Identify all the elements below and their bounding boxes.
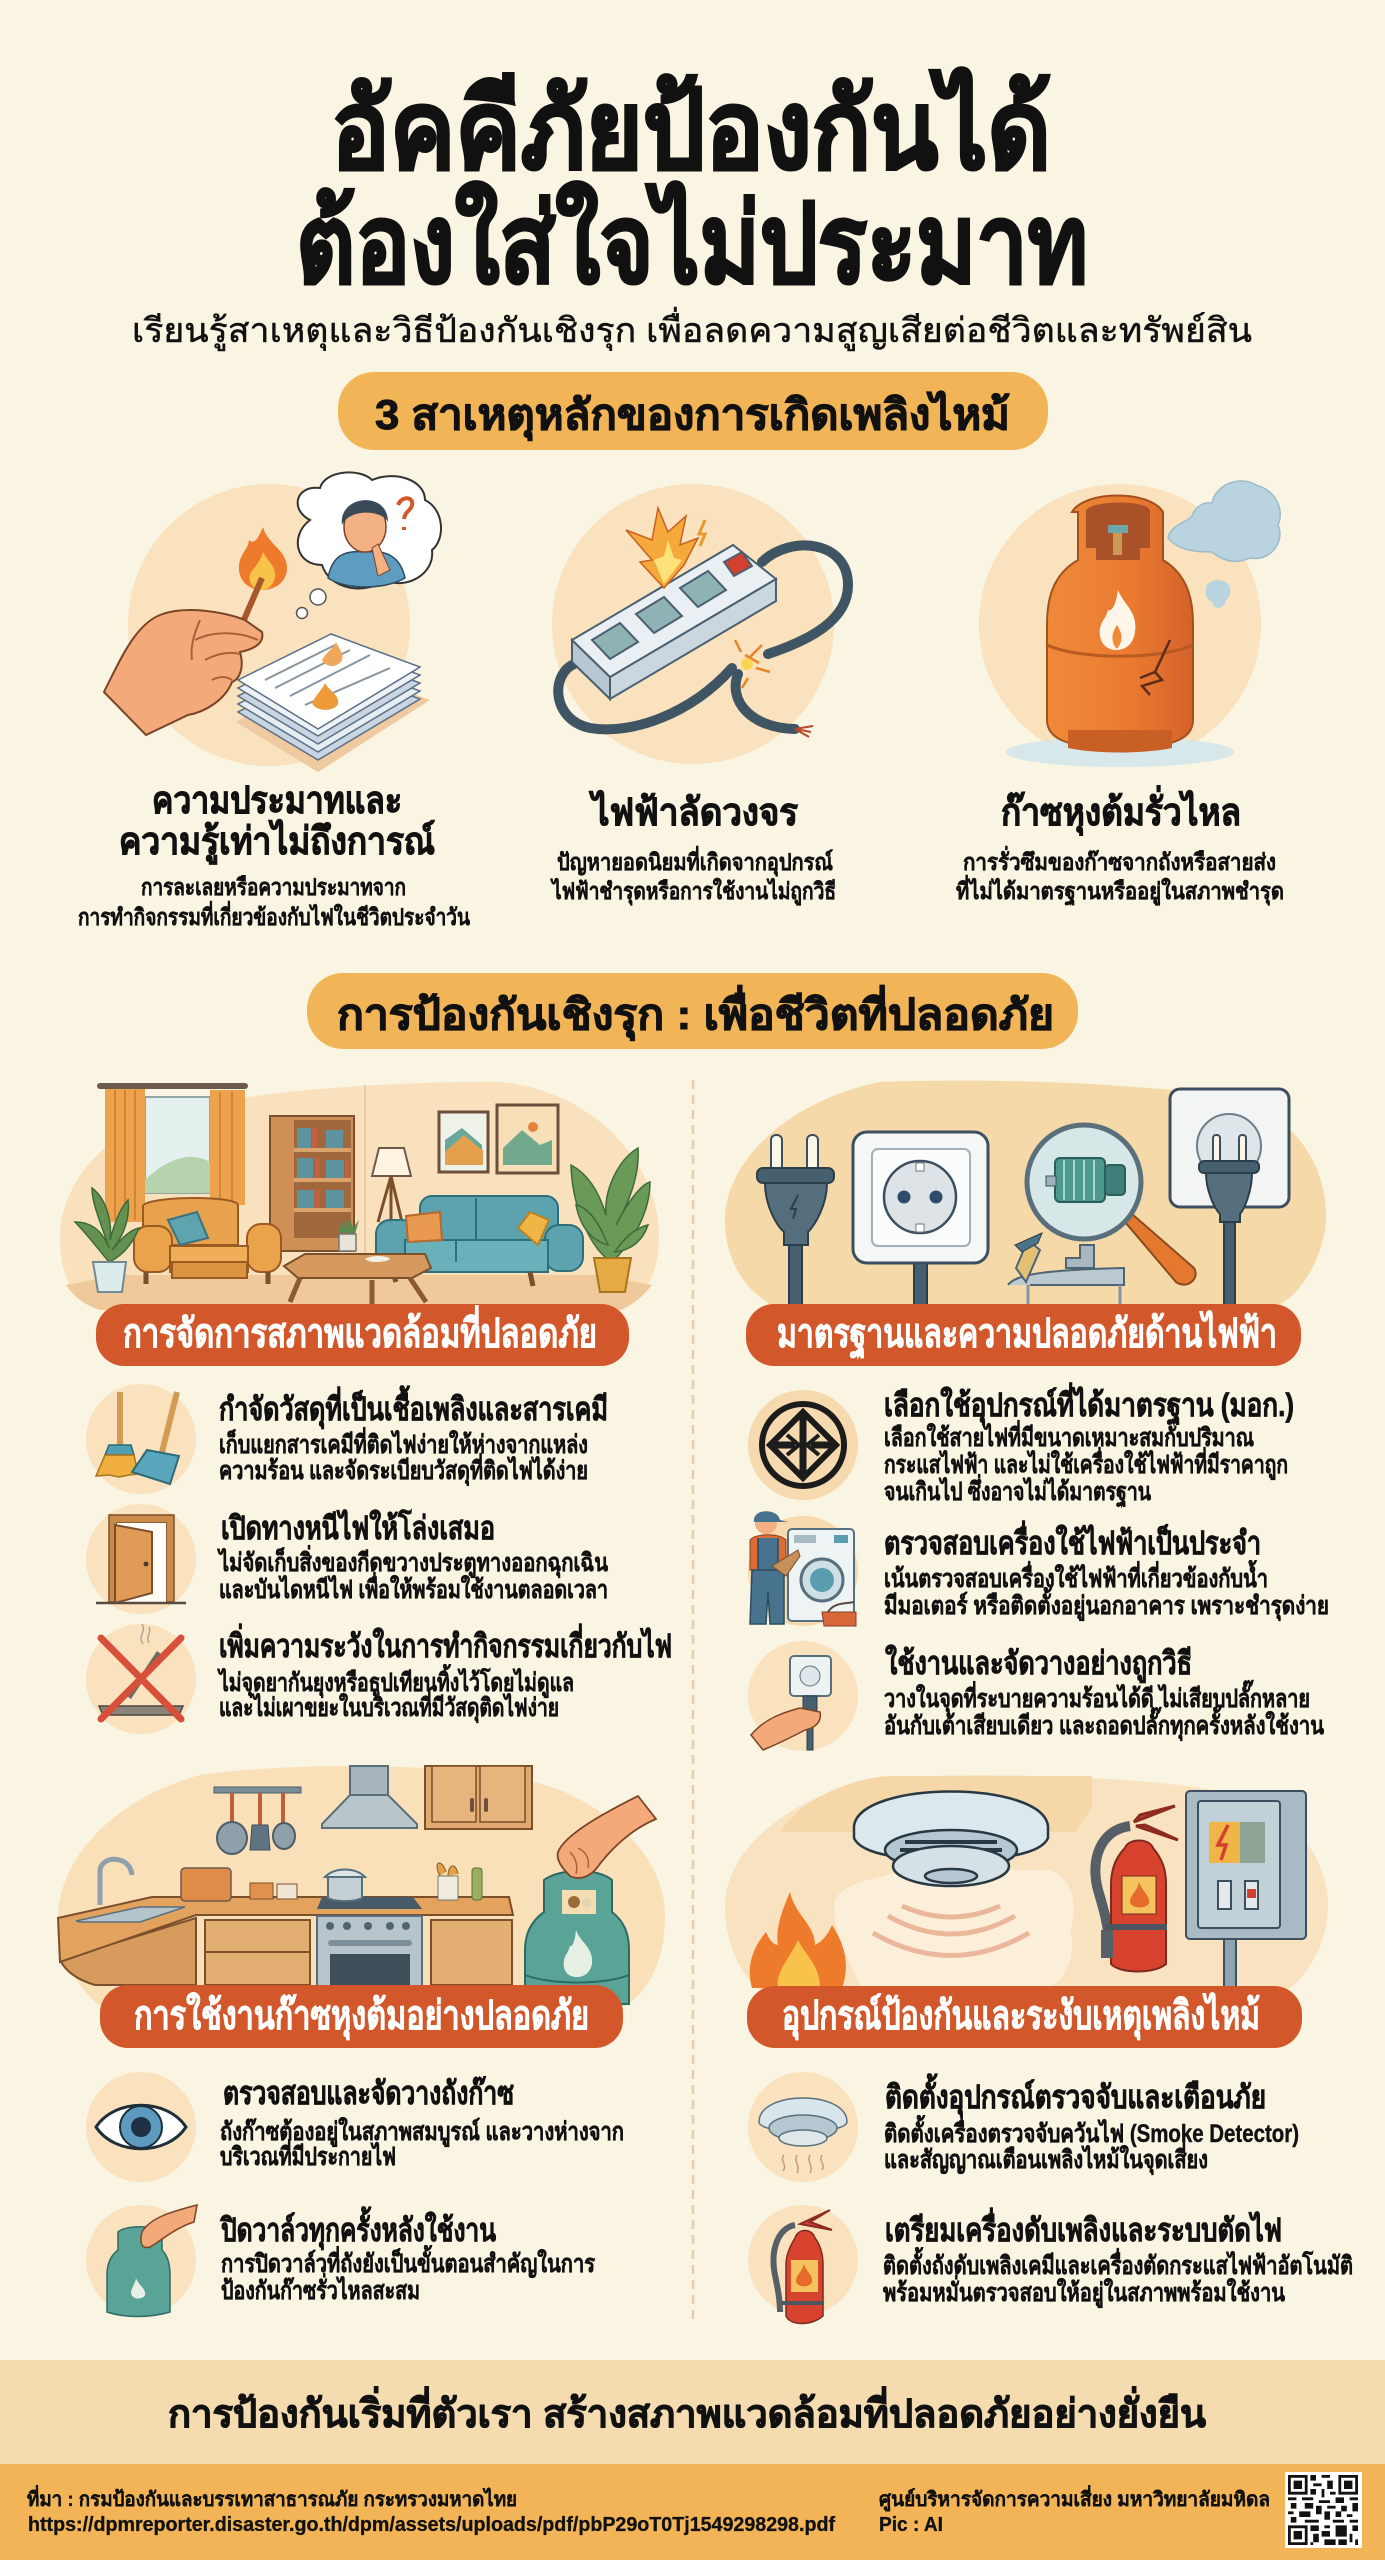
icon: technician and washing machine bbox=[750, 1511, 856, 1626]
icon: range hood bbox=[322, 1766, 417, 1828]
item: careful with fire activities: เพิ่มความระวังในการทำกิจกรรมเกี่ยวกับไฟ bbox=[219, 1623, 672, 1664]
illustration: overloaded power strip bbox=[552, 484, 848, 764]
icon: extinguisher bbox=[1095, 1806, 1178, 1972]
cause text: gas leak bbox=[956, 785, 1284, 906]
subtitle: เรียนรู้สาเหตุและวิธีป้องกันเชิงรุก เพื่อลดความสูญเสียต่อชีวิตและทรัพย์สิน bbox=[132, 307, 1252, 351]
icon: power strip bbox=[572, 545, 776, 699]
title: อัคคีภัยป้องกันได้ bbox=[331, 68, 1051, 192]
item: check gas cylinder: บริเวณที่มีประกายไฟ bbox=[220, 2139, 396, 2171]
item: inspect appliances: ตรวจสอบเครื่องใช้ไฟฟ้าเป็นประจำ bbox=[884, 1520, 1261, 1561]
item: close valve: การปิดวาล์วที่ถังยังเป็นขั้นตอนสำคัญในการ bbox=[221, 2244, 595, 2278]
icon: TIS standard mark bbox=[762, 1404, 844, 1486]
cause text: carelessness bbox=[78, 780, 470, 930]
cause text: short circuit: ปัญหายอดนิยมที่เกิดจากอุปกรณ์ bbox=[557, 845, 833, 877]
icon: hand bbox=[104, 610, 262, 735]
item: remove flammable materials: เก็บแยกสารเคมีที่ติดไฟง่ายให้ห่างจากแหล่ง bbox=[219, 1427, 588, 1459]
illustration: plugs, socket and magnifier bbox=[725, 1081, 1326, 1306]
cause text: carelessness: ความรู้เท่าไม่ถึงการณ์ bbox=[119, 819, 435, 865]
item: proper placement: ใช้งานและจัดวางอย่างถูกวิธี bbox=[885, 1644, 1192, 1684]
icon: paper stack bbox=[236, 634, 430, 772]
icon: hanging utensils bbox=[214, 1787, 301, 1854]
panel: electrical safety bbox=[725, 1081, 1329, 1751]
source credit bbox=[27, 2484, 835, 2536]
icon: plug in wall plate bbox=[1170, 1089, 1289, 1306]
icon: damaged cables bbox=[558, 545, 848, 729]
icon: alarm waves bbox=[873, 1906, 1029, 1956]
organisation credit: Pic : AI bbox=[879, 2514, 943, 2536]
item: remove flammable materials bbox=[86, 1384, 608, 1494]
cause text: carelessness: ความประมาทและ bbox=[152, 780, 402, 822]
item: careful with fire activities bbox=[86, 1623, 672, 1734]
cause text: carelessness: การทำกิจกรรมที่เกี่ยวข้องกับไฟในชีวิตประจำวัน bbox=[78, 900, 470, 930]
item: inspect appliances: เน้นตรวจสอบเครื่องใช้ไฟฟ้าที่เกี่ยวข้องกับน้ำ bbox=[884, 1559, 1268, 1593]
item: inspect appliances bbox=[748, 1511, 1329, 1626]
item: remove flammable materials: ความร้อน และจัดระเบียบวัสดุที่ติดไฟได้ง่าย bbox=[219, 1453, 588, 1487]
heading: proactive prevention bbox=[307, 973, 1078, 1049]
item: use certified equipment: จนเกินไป ซึ่งอาจไม่ได้มาตรฐาน bbox=[884, 1474, 1151, 1508]
footer bbox=[0, 2464, 1385, 2560]
icon: thought bubble with person bbox=[296, 472, 441, 618]
icon: shelf plant bbox=[338, 1218, 359, 1251]
cause text: gas leak: การรั่วซึมของก๊าซจากถังหรือสายส่ง bbox=[963, 845, 1276, 875]
icon: cylinder bbox=[1047, 496, 1193, 752]
title: ต้องใส่ใจไม่ประมาท bbox=[296, 181, 1088, 306]
icon: electrical panel bbox=[1186, 1791, 1306, 1987]
icon: sofa bbox=[376, 1196, 583, 1286]
icon: wall socket bbox=[853, 1132, 988, 1306]
icon: plug left bbox=[757, 1135, 834, 1305]
banner: safe environment: การจัดการสภาพแวดล้อมที่ปลอดภัย bbox=[123, 1305, 597, 1356]
panel: safe cooking gas bbox=[58, 1766, 665, 2316]
source credit: ที่มา : กรมป้องกันและบรรเทาสาธารณภัย กระทรวงมหาดไทย bbox=[27, 2484, 517, 2511]
banner: safe cooking gas bbox=[100, 1985, 623, 2048]
illustration: living room bbox=[60, 1082, 659, 1310]
item: use certified equipment bbox=[748, 1382, 1294, 1508]
icon: stove bbox=[317, 1870, 422, 1986]
illustration: detector, extinguisher, panel bbox=[725, 1775, 1328, 1995]
icon: mini extinguisher bbox=[774, 2210, 832, 2324]
item: check gas cylinder bbox=[86, 2072, 624, 2182]
banner: electrical safety bbox=[746, 1304, 1301, 1366]
icon: mini cylinder with hand bbox=[107, 2205, 197, 2316]
item: install detectors: และสัญญาณเตือนเพลิงไหม้ในจุดเสี่ยง bbox=[884, 2142, 1208, 2176]
item: install detectors: ติดตั้งเครื่องตรวจจับควันไฟ (Smoke Detector) bbox=[884, 2114, 1299, 2148]
item: install detectors: ติดตั้งอุปกรณ์ตรวจจับและเตือนภัย bbox=[885, 2073, 1266, 2118]
icon: hand on valve bbox=[558, 1796, 656, 1878]
icon: pipe valve bbox=[1008, 1233, 1124, 1304]
organisation credit: ศูนย์บริหารจัดการความเสี่ยง มหาวิทยาลัยมหิดล bbox=[879, 2484, 1270, 2513]
icon: spark burst bbox=[626, 508, 813, 737]
icon: crossed out incense bbox=[99, 1624, 183, 1719]
QR code bbox=[1285, 2472, 1362, 2548]
icon: hand unplugging bbox=[751, 1656, 831, 1750]
icon: broom and dustpan bbox=[96, 1392, 179, 1484]
item: prepare extinguisher bbox=[748, 2205, 1353, 2324]
heading: three main causes bbox=[338, 372, 1048, 450]
icon: left plant bbox=[75, 1188, 139, 1292]
icon: mini smoke detector bbox=[759, 2098, 847, 2173]
item: careful with fire activities: และไม่เผาขยะในบริเวณที่มีวัสดุติดไฟง่าย bbox=[219, 1690, 559, 1724]
item: check gas cylinder: ถังก๊าซต้องอยู่ในสภาพสมบูรณ์ และวางห่างจาก bbox=[220, 2116, 624, 2148]
item: use certified equipment: เลือกใช้สายไฟที่มีขนาดเหมาะสมกับปริมาณ bbox=[884, 1420, 1254, 1452]
item: prepare extinguisher: เตรียมเครื่องดับเพลิงและระบบตัดไฟ bbox=[885, 2207, 1282, 2248]
icon: right plant bbox=[571, 1148, 650, 1292]
icon: green gas cylinder bbox=[525, 1871, 629, 2004]
title bbox=[296, 68, 1088, 306]
banner: safe cooking gas: การใช้งานก๊าซหุงต้มอย่างปลอดภัย bbox=[134, 1992, 589, 2041]
icon: bookcase bbox=[270, 1116, 354, 1251]
icon: wall cabinet bbox=[425, 1766, 532, 1829]
item: use certified equipment: เลือกใช้อุปกรณ์ที่ได้มาตรฐาน (มอก.) bbox=[884, 1382, 1294, 1426]
item: proper placement bbox=[748, 1641, 1324, 1751]
icon: wall pictures bbox=[439, 1105, 558, 1173]
heading: proactive prevention: การป้องกันเชิงรุก : เพื่อชีวิตที่ปลอดภัย bbox=[337, 985, 1054, 1041]
icon: floor lamp bbox=[372, 1148, 411, 1222]
icon: armchair bbox=[134, 1198, 281, 1284]
item: prepare extinguisher: พร้อมหมั่นตรวจสอบให้อยู่ในสภาพพร้อมใช้งาน bbox=[883, 2275, 1285, 2309]
icon: smoke detector bbox=[854, 1792, 1048, 1886]
icon: eye bbox=[96, 2105, 186, 2149]
item: keep fire escape clear: เปิดทางหนีไฟให้โล่งเสมอ bbox=[221, 1509, 495, 1546]
icon: magnifier with motor bbox=[1027, 1125, 1196, 1285]
banner: fire prevention equipment bbox=[747, 1986, 1302, 2048]
closing message band bbox=[0, 2360, 1385, 2464]
item: close valve bbox=[86, 2205, 595, 2316]
banner: safe environment bbox=[96, 1304, 629, 1366]
icon: coffee table bbox=[284, 1254, 431, 1304]
organisation credit bbox=[879, 2484, 1270, 2536]
icon: window with curtains bbox=[97, 1083, 248, 1222]
icon: puddle bbox=[1006, 737, 1234, 767]
cause text: gas leak: ก๊าซหุงต้มรั่วไหล bbox=[1001, 785, 1241, 836]
icon: gas cloud bbox=[1168, 481, 1280, 608]
illustration: leaking gas cylinder bbox=[979, 481, 1280, 767]
item: install detectors bbox=[748, 2072, 1299, 2182]
item: close valve: ป้องกันก๊าซรั่วไหลสะสม bbox=[221, 2273, 420, 2305]
illustration: kitchen bbox=[58, 1766, 665, 2006]
item: check gas cylinder: ตรวจสอบและจัดวางถังก๊าซ bbox=[223, 2075, 514, 2111]
cause text: short circuit: ไฟฟ้าลัดวงจร bbox=[588, 790, 799, 834]
panel: safe environment bbox=[60, 1082, 672, 1734]
item: keep fire escape clear: และบันไดหนีไฟ เพื่อให้พร้อมใช้งานตลอดเวลา bbox=[219, 1572, 608, 1604]
icon: open door bbox=[96, 1515, 186, 1603]
closing message band: การป้องกันเริ่มที่ตัวเรา สร้างสภาพแวดล้อมที่ปลอดภัยอย่างยั่งยืน bbox=[168, 2386, 1206, 2436]
illustration: match, hand and papers bbox=[104, 472, 441, 772]
item: keep fire escape clear: ไม่จัดเก็บสิ่งของกีดขวางประตูทางออกฉุกเฉิน bbox=[217, 1545, 608, 1579]
cause text: short circuit: ไฟฟ้าชำรุดหรือการใช้งานไม่ถูกวิธี bbox=[550, 877, 836, 906]
icon: counter items bbox=[181, 1863, 482, 1901]
panel: fire detection equipment bbox=[725, 1775, 1353, 2324]
cause text: gas leak: ที่ไม่ได้มาตรฐานหรืออยู่ในสภาพชำรุด bbox=[956, 874, 1284, 906]
cause text: short circuit bbox=[550, 790, 836, 906]
item: close valve: ปิดวาล์วทุกครั้งหลังใช้งาน bbox=[220, 2206, 496, 2251]
icon: counter and cabinets bbox=[58, 1859, 513, 1985]
item: keep fire escape clear bbox=[86, 1504, 608, 1614]
item: careful with fire activities: ไม่จุดยากันยุงหรือธูปเทียนทิ้งไว้โดยไม่ดูแล bbox=[217, 1663, 574, 1699]
heading: three main causes: 3 สาเหตุหลักของการเกิดเพลิงไหม้ bbox=[375, 390, 1010, 441]
cause text: carelessness: การละเลยหรือความประมาทจาก bbox=[141, 874, 406, 900]
icon: burning match bbox=[239, 527, 287, 622]
item: remove flammable materials: กำจัดวัสดุที่เป็นเชื้อเพลิงและสารเคมี bbox=[219, 1385, 608, 1430]
icon: flame bbox=[750, 1892, 846, 1988]
source credit: https://dpmreporter.disaster.go.th/dpm/assets/uploads/pdf/pbP29oT0Tj1549298298.pdf bbox=[28, 2514, 835, 2536]
